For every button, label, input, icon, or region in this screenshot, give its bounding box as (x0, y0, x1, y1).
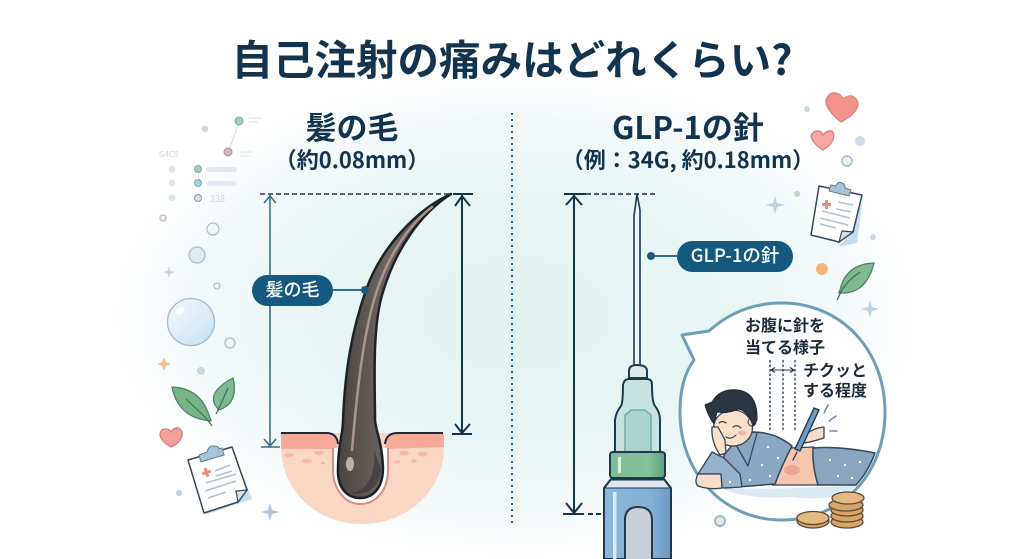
label pill: hair (252, 275, 369, 306)
speech bubble (680, 303, 885, 520)
width marker (770, 360, 795, 430)
ring (715, 516, 725, 526)
panel: hair (252, 103, 473, 524)
ear (748, 418, 756, 426)
pen injector (795, 408, 819, 451)
center divider (511, 113, 513, 525)
data nodes (159, 117, 262, 205)
cheek hand (712, 427, 726, 455)
callout: abdomen illustration (680, 303, 885, 528)
hearts (811, 93, 858, 150)
callout text: slight prick: チクッと (803, 357, 867, 381)
bubbles and dots (794, 106, 876, 275)
leaf (837, 263, 874, 300)
label pill: hair: 髪の毛 (266, 276, 320, 302)
dimension line: guide left (260, 194, 450, 447)
panel: needle (562, 103, 814, 559)
heading: hair: 髪の毛 (306, 103, 398, 148)
title: 自己注射の痛みはどれくらい? (232, 27, 792, 87)
heading: GLP-1 needle: GLP-1の針 (612, 103, 764, 148)
resting hand (696, 474, 722, 489)
heart (160, 428, 182, 447)
pants (813, 448, 875, 485)
facial features (719, 422, 741, 438)
sparkles (157, 266, 279, 521)
right decorations (765, 93, 879, 318)
leaves (172, 378, 234, 426)
hair strand (338, 194, 451, 498)
syringe (604, 194, 671, 559)
subheading: hair diameter: （約0.08mm） (275, 143, 429, 175)
clipboard (188, 446, 252, 515)
skin cross-section (281, 433, 444, 524)
left decorations (157, 117, 279, 521)
clipboard (811, 182, 863, 247)
belly skin (772, 447, 819, 485)
label pill: needle (647, 241, 793, 272)
dimension line: needle length (563, 194, 657, 514)
callout text: placing the needle: 当てる様子 (745, 334, 825, 358)
dimension line: hair length (452, 194, 473, 434)
hand on pen (803, 427, 824, 443)
sparkles (765, 196, 879, 318)
data nodes: 238 (210, 192, 225, 205)
face (714, 410, 752, 446)
pajama top (722, 432, 792, 488)
coins (797, 492, 864, 528)
bubbles (160, 215, 235, 348)
hair (705, 390, 757, 426)
callout text: slight prick: する程度 (803, 377, 867, 401)
data nodes: G4C9 (159, 149, 178, 160)
callout text: placing the needle: お腹に針を (745, 312, 825, 336)
sleeve (698, 452, 742, 488)
label pill: needle: GLP-1の針 (691, 242, 779, 268)
subheading: needle gauge: （例：34G, 約0.18mm） (562, 143, 814, 175)
illustration: man lying down (696, 390, 875, 498)
